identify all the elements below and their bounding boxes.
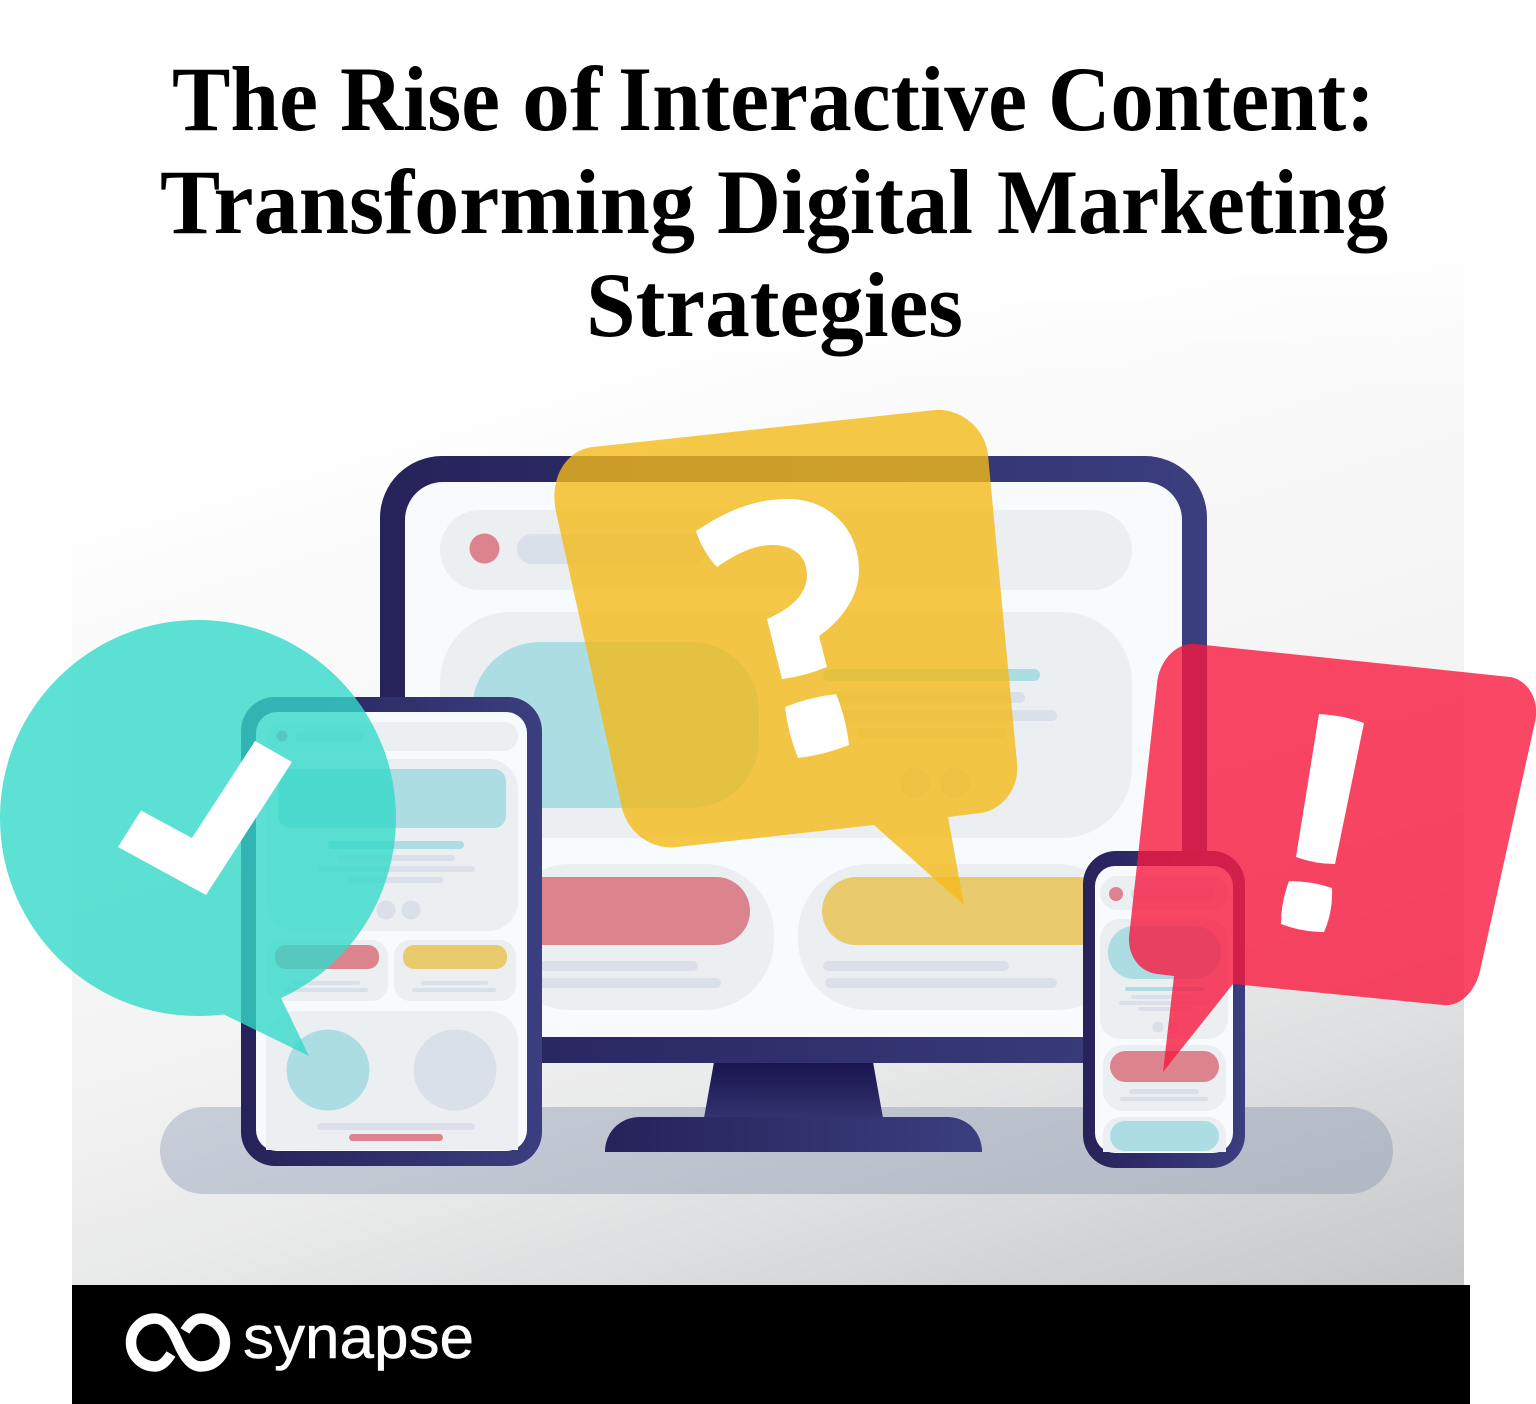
smartphone bbox=[1083, 851, 1245, 1168]
phone hero panel bbox=[1100, 919, 1228, 1039]
phone bottom card bbox=[1103, 1117, 1226, 1152]
monitor screen bbox=[405, 482, 1182, 1037]
background gradient panel bbox=[72, 200, 1464, 1286]
monitor frame bbox=[380, 456, 1207, 1063]
title: Digital bbox=[717, 151, 973, 253]
title: Interactive bbox=[618, 48, 1027, 150]
monitor hero panel bbox=[440, 612, 1132, 838]
monitor lower left card bbox=[500, 864, 774, 1010]
phone top bar bbox=[1100, 876, 1228, 910]
icon: check mark bbox=[118, 741, 292, 895]
icon: question mark bbox=[696, 499, 859, 758]
tablet hero panel bbox=[266, 759, 518, 931]
red bubble bbox=[1129, 644, 1536, 1072]
table surface bbox=[160, 1107, 1393, 1194]
monitor stand bbox=[704, 1062, 883, 1118]
title: Marketing bbox=[997, 151, 1388, 253]
tablet left card bbox=[266, 940, 388, 1001]
tablet right card bbox=[394, 940, 516, 1001]
title: Rise bbox=[340, 48, 500, 150]
monitor lower right card bbox=[798, 864, 1128, 1010]
title: Strategies bbox=[586, 254, 963, 356]
synapse logo mark bbox=[131, 1318, 225, 1366]
green bubble bbox=[0, 620, 396, 1056]
title bbox=[160, 48, 1388, 356]
footer bar bbox=[72, 1285, 1470, 1404]
title: Transforming bbox=[160, 151, 695, 253]
monitor base bbox=[605, 1117, 982, 1152]
red speech bubble with exclamation mark bbox=[1129, 644, 1536, 1072]
desktop monitor bbox=[380, 456, 1207, 1152]
phone screen bbox=[1095, 866, 1233, 1153]
monitor top bar bbox=[440, 510, 1132, 590]
yellow speech bubble with question mark bbox=[554, 410, 1017, 905]
tablet screen bbox=[256, 712, 527, 1151]
tablet bottom panel bbox=[266, 1011, 518, 1150]
synapse wordmark: synapse bbox=[243, 1304, 474, 1371]
title: of bbox=[522, 48, 603, 150]
tablet top bar bbox=[266, 722, 518, 751]
tablet frame bbox=[241, 697, 542, 1166]
green speech bubble with check mark bbox=[0, 620, 396, 1056]
title: Content: bbox=[1048, 48, 1375, 150]
icon: exclamation mark bbox=[1281, 714, 1364, 932]
title: The bbox=[172, 48, 318, 150]
phone frame bbox=[1083, 851, 1245, 1168]
yellow bubble bbox=[554, 410, 1017, 905]
tablet bbox=[241, 697, 542, 1166]
phone middle card bbox=[1103, 1045, 1226, 1111]
